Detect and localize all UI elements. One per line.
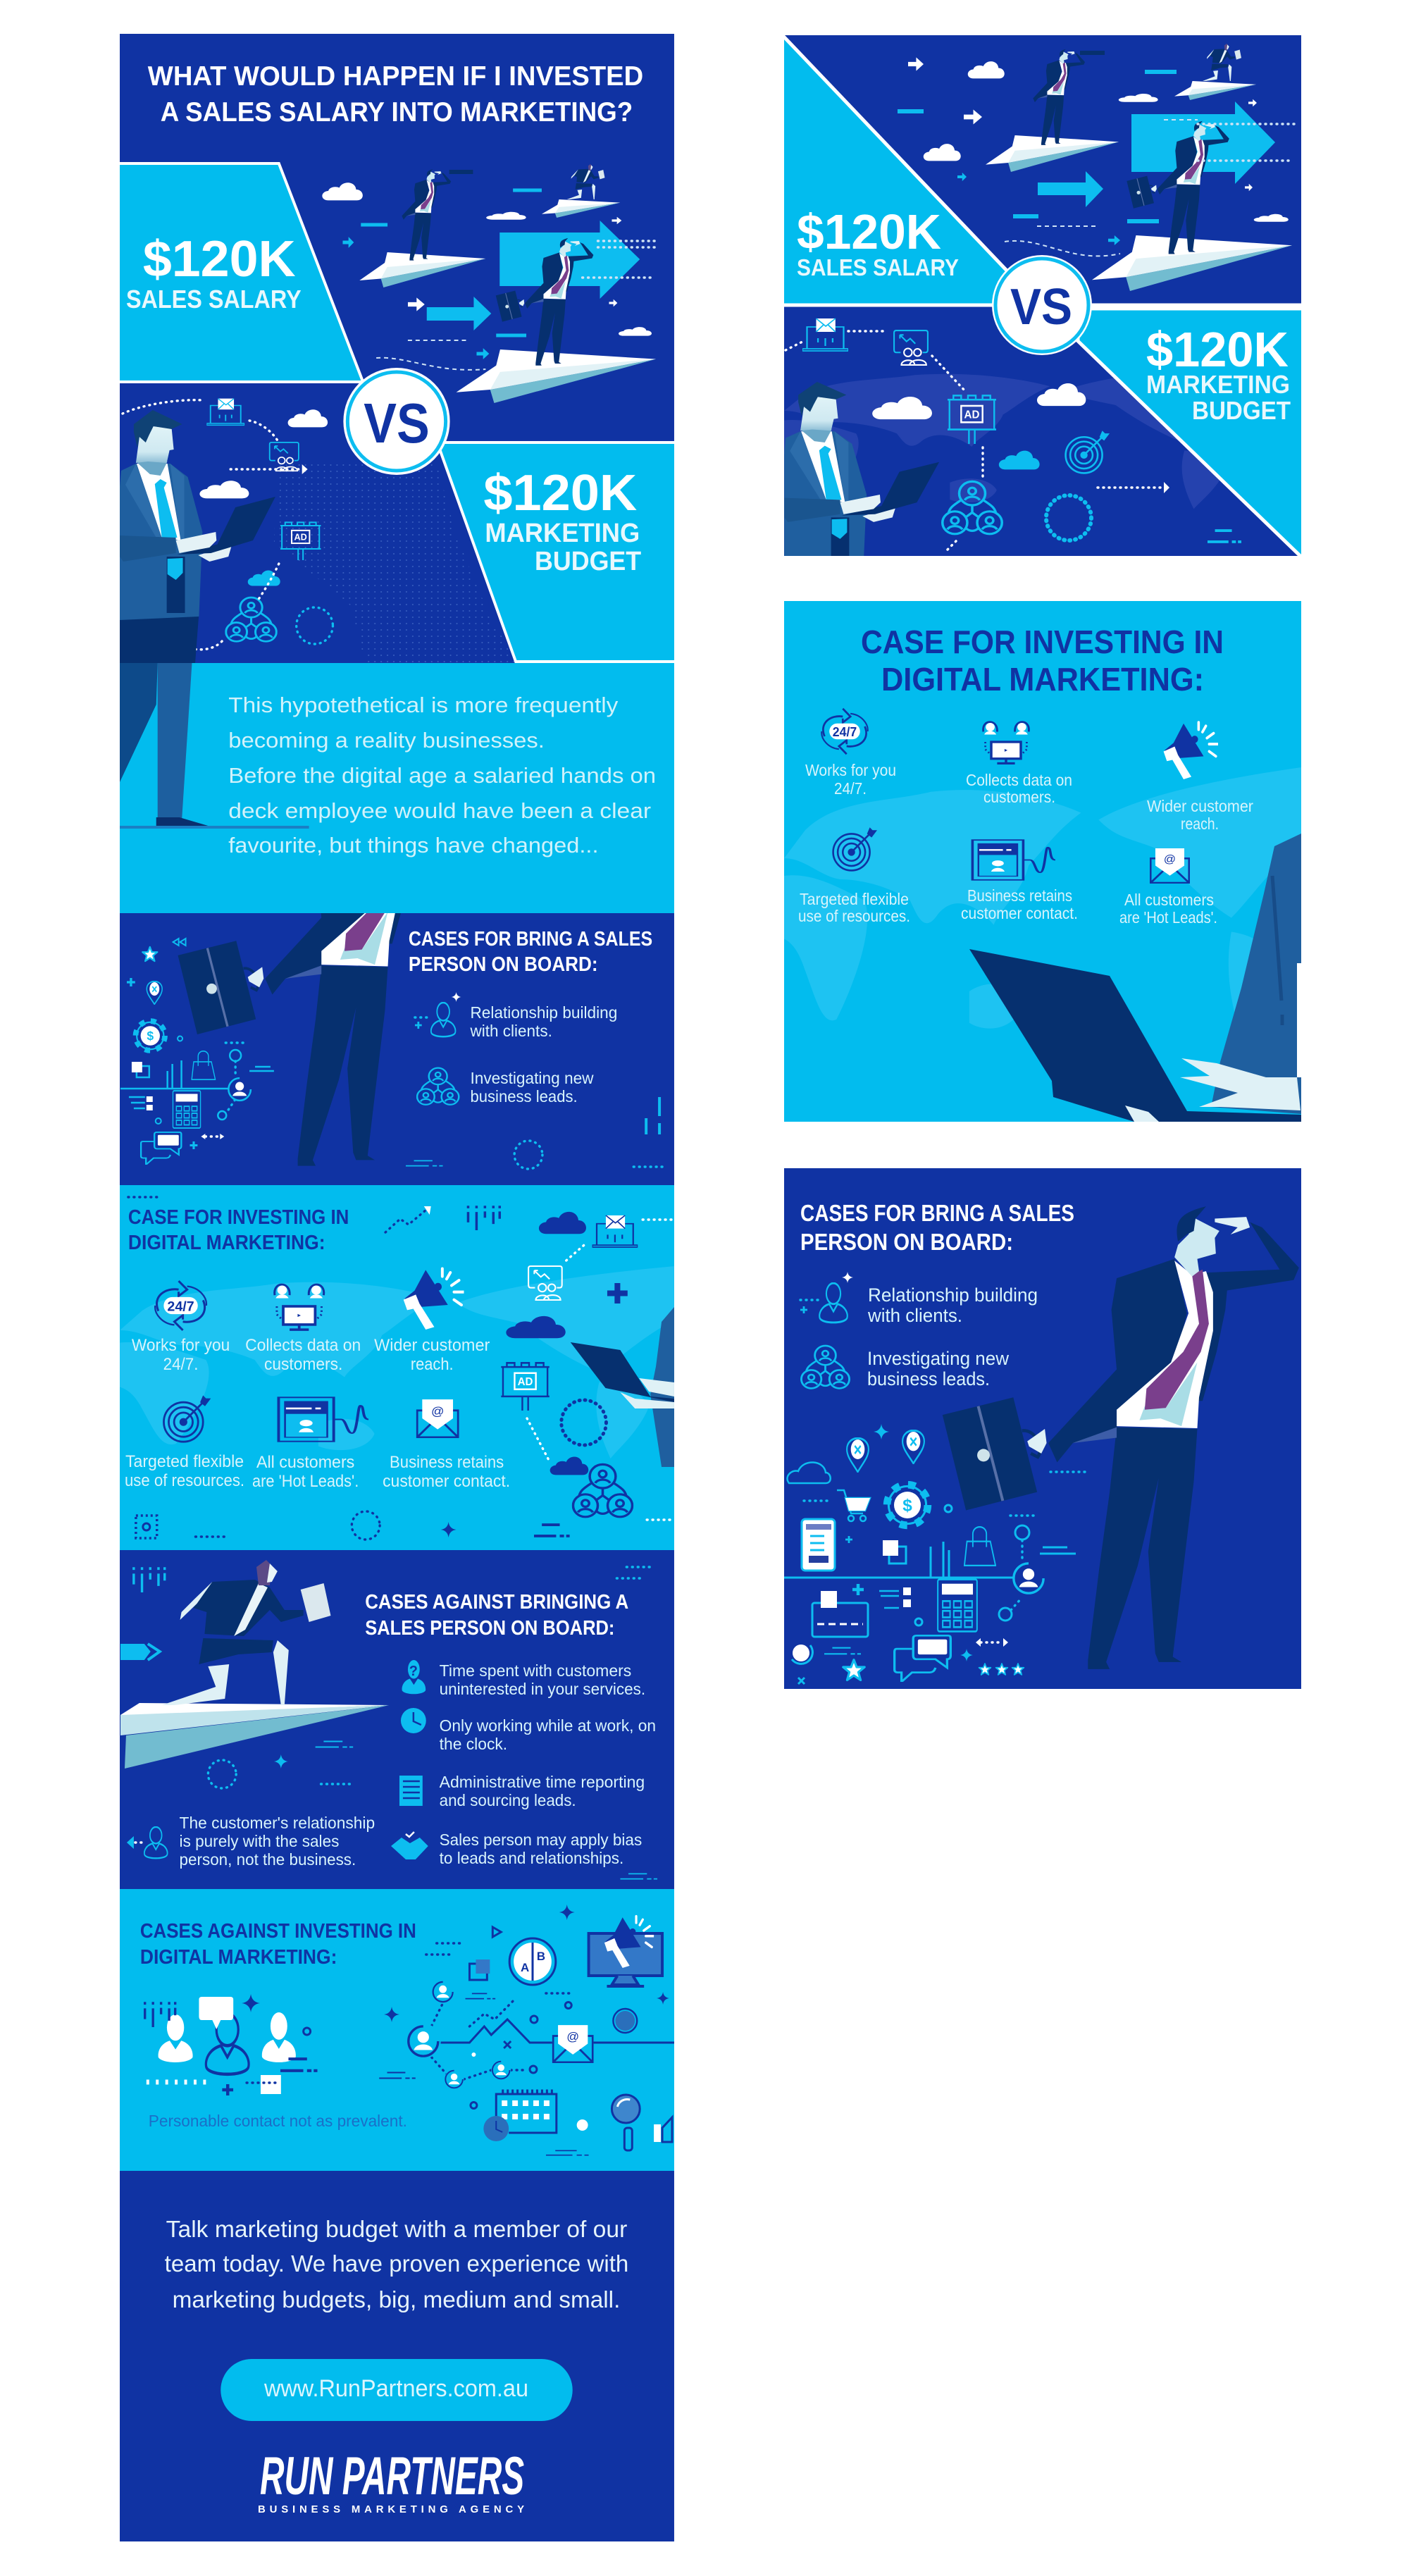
icon: people chart [894,330,928,365]
hands [1125,1058,1301,1122]
title: WHAT WOULD HAPPEN IF I INVESTED [148,61,643,92]
icon: clock [401,1708,426,1733]
icon: megaphone [404,1269,464,1330]
text: time spent [440,1661,645,1698]
text: investigating leads [470,1069,594,1106]
panel: intro text [120,663,674,913]
laptop [969,949,1301,1122]
icon: trio [943,481,1002,534]
heading: DIGITAL MARKETING: [881,661,1204,698]
sales salary amount: $120K [143,231,296,287]
running woman small [1203,44,1241,81]
small arrows [342,190,659,370]
icon: mail [553,2025,592,2062]
intro paragraph [228,693,656,857]
icon: magnifier [612,2095,640,2150]
logo: BUSINESS MARKETING AGENCY [258,2503,524,2515]
icon: collects data [275,1284,324,1330]
labels: are 'Hot Leads'. [252,1472,359,1491]
labels: 24/7. [163,1355,198,1374]
panel: case for digital marketing [120,1185,674,1550]
icon: pie and thumb [577,2117,672,2142]
intro paragraph: Before the digital age a salaried hands on [228,763,656,788]
labels: Wider customer [374,1336,490,1355]
labels: reach. [1181,815,1219,833]
man lower body with briefcase [178,783,471,1166]
icon: megaphone [1164,722,1218,779]
labels: use of resources. [125,1471,244,1490]
labels: Wider customer [1147,797,1253,815]
icon cluster [784,1424,1088,1684]
text: personable contact: Personable contact not as prevalent. [149,2112,407,2130]
intro paragraph: This hypotethetical is more frequently [228,693,619,717]
heading: CASE FOR INVESTING IN [128,1206,349,1229]
heading: DIGITAL MARKETING: [140,1946,337,1969]
sales salary label: SALES SALARY [126,285,302,314]
paper plane [120,1703,389,1769]
plane mid [359,252,485,287]
icon: leads network [801,1346,850,1388]
icon: checklist [399,1776,423,1806]
lines [1208,531,1241,542]
labels: Works for you [805,761,896,779]
labels: Collects data on [245,1336,361,1355]
world map [784,767,1301,1041]
icon: billboard [948,395,996,444]
icon: A/B test: B [537,1950,545,1963]
icon: laptop mail [802,318,848,351]
panel: marketing budget shape [437,442,681,662]
text: sales person bias: Sales person may apply bias [440,1831,642,1849]
labels: customer contact. [383,1472,510,1491]
text: sales person bias: to leads and relationships. [440,1849,623,1867]
closing text: team today. We have proven experience with [165,2250,628,2277]
icon: relationship person [415,992,461,1036]
decor bottom [136,1511,570,1540]
panel: footer call to action [120,2171,674,2541]
labels: All customers [256,1453,354,1472]
text: customer relationship: person, not the business. [180,1850,356,1869]
text: customer relationship [180,1814,375,1869]
text: only working [440,1716,656,1753]
icon: collects data [983,722,1029,763]
VS badge [343,368,450,475]
clouds [872,61,1289,469]
heading: CASES AGAINST INVESTING IN [140,1920,416,1943]
decor top [128,1197,628,1475]
marketing budget label [486,523,641,571]
icon: calendar and clock [483,2091,557,2141]
heading: SALES PERSON ON BOARD: [365,1617,614,1640]
man with laptop [784,382,939,767]
labels: Targeted flexible [800,890,909,908]
intro paragraph: favourite, but things have changed... [228,833,599,857]
text: investigating leads: business leads. [867,1368,990,1389]
small arrows [898,57,1296,256]
heading [365,1591,628,1640]
main vertical infographic [113,34,681,2541]
panel: hero comparison [113,34,681,826]
panel: versus square [777,30,1308,767]
heading: CASES FOR BRING A SALES [409,928,652,950]
icon: laptop mail [592,1215,638,1247]
icon: billboard [280,522,321,560]
icon: target [163,1395,211,1442]
labels: Works for you [132,1336,230,1355]
icon: 24/7 [155,1281,206,1330]
world map [120,1266,674,1459]
text: time spent: uninterested in your services. [440,1680,645,1698]
marketing label [1146,370,1291,425]
icon: laptop mail [206,399,244,425]
sales amount: $120K [797,204,941,259]
salesman arm and laptop [571,1307,674,1467]
decorative marks [406,1097,666,1169]
clouds top [322,182,652,336]
icon: A/B test [509,1938,556,1985]
text: relationship building: with clients. [469,1022,552,1040]
text: administrative: Administrative time reporting [440,1773,645,1791]
text: investigating leads: business leads. [470,1087,578,1106]
icon: people chart [528,1266,562,1300]
heading [409,928,652,976]
icon: mail [1150,848,1189,883]
website button: www.RunPartners.com.au [263,2375,528,2402]
small arrow [427,297,491,330]
dotted paths [123,400,333,650]
man with telescope [402,169,473,261]
man with telescope [1033,49,1105,145]
labels [125,1336,510,1491]
icon cluster left [120,939,274,1165]
icon: window [278,1397,368,1442]
man with briefcase [943,1206,1299,1669]
VS badge: VS [364,392,430,454]
running woman small [567,164,604,199]
labels: All customers [1124,891,1214,909]
man with briefcase [496,238,593,366]
icon: monitor megaphone [589,1916,662,1986]
arrow tip [1164,482,1169,493]
logo [258,2446,524,2515]
icon: billboard [501,1363,550,1411]
labels: Business retains [390,1453,504,1472]
text: only working: the clock. [440,1735,507,1753]
icon: person with arrow [127,1827,168,1858]
sales triangle [777,30,1007,305]
intro paragraph: becoming a reality businesses. [228,728,545,753]
heading: CASES FOR BRING A SALES [800,1200,1074,1226]
heading [800,1200,1074,1255]
labels: customers. [983,788,1055,806]
text: investigating leads [867,1348,1009,1389]
people icons [145,1994,318,2095]
icon: question person: ? [409,1664,418,1679]
labels: reach. [411,1355,454,1374]
icon: trio [573,1464,633,1517]
panel: cases against digital marketing [120,1889,674,2171]
small arrow [1038,171,1103,207]
text: sales person bias [440,1831,642,1867]
VS badge [992,255,1092,355]
icon: A/B test: A [521,1961,529,1974]
labels: use of resources. [798,907,910,925]
marketing budget label: BUDGET [535,547,641,576]
icon: mail [417,1399,458,1437]
labels: Business retains [967,886,1072,905]
marketing budget label: MARKETING [485,519,640,548]
labels: Collects data on [966,771,1072,789]
marketing label: MARKETING [1146,370,1290,399]
icon: people chart [270,442,299,471]
closing text: Talk marketing budget with a member of our [166,2216,627,2242]
closing text [165,2216,628,2312]
text: administrative: and sourcing leads. [440,1791,576,1809]
arrow tip [302,464,308,474]
text: relationship building [867,1284,1038,1326]
logo: RUN PARTNERS [260,2446,524,2506]
heading [140,1920,416,1969]
heading: CASE FOR INVESTING IN [861,624,1224,660]
VS badge: VS [1010,279,1072,335]
website button [221,2359,573,2421]
planes [986,81,1292,291]
icon: 24/7 [821,709,868,754]
salesman suit [1211,834,1301,1114]
icon: target [833,827,877,870]
sales label: SALES SALARY [797,254,959,280]
decorative circle [613,2009,637,2033]
running woman [162,1560,330,1705]
panel: cases for sales person [120,783,674,1185]
text: time spent: Time spent with customers [440,1661,631,1680]
heading [861,624,1224,698]
labels [798,761,1253,927]
heading: PERSON ON BOARD: [409,953,598,976]
icon: handshake [391,1832,428,1859]
icon: leads network [417,1068,459,1105]
text: only working: Only working while at work, on [440,1716,656,1735]
text: investigating leads: Investigating new [470,1069,594,1087]
man with briefcase [1126,121,1229,254]
big arrow [1131,101,1275,184]
clouds lower [199,409,328,586]
heading [128,1206,349,1254]
man with laptop [120,410,275,826]
dotted paths and circle [786,331,1162,550]
panel: cases against sales person [120,1550,674,1889]
icon: target [1066,431,1110,473]
panel: sales salary shape [113,163,363,382]
world map [784,361,1247,509]
icon: relationship person [800,1272,853,1323]
panel: sales person square [784,1168,1301,1689]
text: administrative [440,1773,645,1809]
text: relationship building [469,1003,617,1040]
icon: question person [402,1660,426,1694]
marketing amount: $120K [1146,322,1289,377]
labels: are 'Hot Leads'. [1119,908,1217,927]
intro paragraph: deck employee would have been a clear [228,798,651,823]
dotted paths and circle [527,1220,674,1520]
decorative marks [120,1567,657,1879]
text: relationship building: with clients. [867,1305,962,1326]
marketing triangle [1078,309,1308,564]
title: A SALES SALARY INTO MARKETING? [161,97,633,128]
labels: customer contact. [961,904,1078,922]
panel: digital marketing square [784,601,1301,1122]
heading: CASES AGAINST BRINGING A [365,1591,628,1614]
icon: network trio [226,597,276,641]
title [148,66,643,121]
text: relationship building: Relationship building [470,1003,617,1022]
labels: 24/7. [834,779,867,798]
heading: PERSON ON BOARD: [800,1229,1013,1255]
plane small [542,199,620,218]
closing text: marketing budgets, big, medium and small. [173,2286,620,2312]
big arrow [499,221,640,299]
text: relationship building: Relationship building [868,1284,1038,1306]
heading: DIGITAL MARKETING: [128,1232,325,1254]
map dots [274,458,519,663]
marketing label: BUDGET [1192,396,1291,425]
text: investigating leads: Investigating new [867,1348,1009,1369]
labels: Targeted flexible [125,1452,244,1471]
labels: customers. [264,1355,342,1374]
text: customer relationship: is purely with the sales [180,1832,339,1850]
plane large [457,349,656,403]
process network [379,1905,674,2155]
marketing budget amount: $120K [483,465,637,521]
icon: window [972,840,1055,880]
text: customer relationship: The customer's relationship [180,1814,375,1832]
